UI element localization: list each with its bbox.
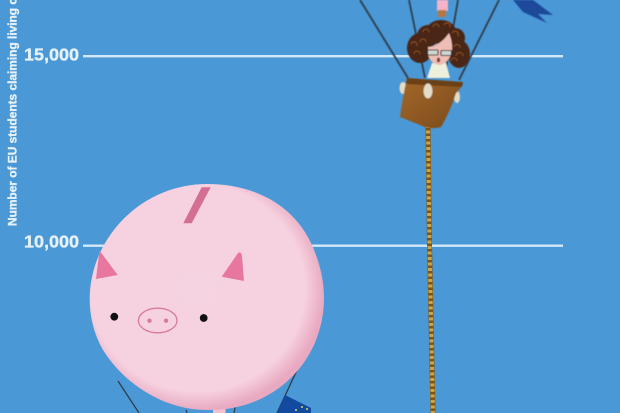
pig neck	[213, 405, 226, 413]
right ear	[222, 252, 244, 281]
axis label: 10,000: 10,000	[24, 232, 79, 252]
student body	[427, 63, 450, 78]
hair back	[407, 20, 470, 68]
hot-air balloon with student	[360, 0, 553, 128]
slot	[183, 187, 211, 223]
pig ropes	[118, 340, 311, 413]
gridline: 10,000	[83, 244, 563, 247]
hair curls	[411, 23, 463, 61]
glasses	[428, 50, 452, 56]
basket rim	[406, 78, 463, 87]
right eye	[200, 314, 208, 322]
balloon ropes	[360, 0, 499, 80]
sandbag	[424, 84, 432, 98]
axis title: Number of EU students claiming living c	[8, 0, 20, 226]
mouth	[437, 58, 440, 62]
flag on pig rope	[277, 395, 311, 413]
balloon neck	[437, 0, 448, 17]
climbing rope	[428, 125, 433, 413]
flag on balloon	[513, 0, 553, 23]
left ear	[96, 250, 118, 279]
piggy bank balloon	[90, 184, 324, 413]
gridline: 15,000	[83, 55, 563, 57]
axis label: 15,000: 15,000	[24, 44, 79, 64]
face	[428, 33, 452, 65]
left eye	[110, 313, 118, 321]
pig body	[90, 184, 324, 410]
snout	[138, 308, 177, 333]
basket	[400, 78, 463, 128]
hands	[400, 82, 460, 103]
